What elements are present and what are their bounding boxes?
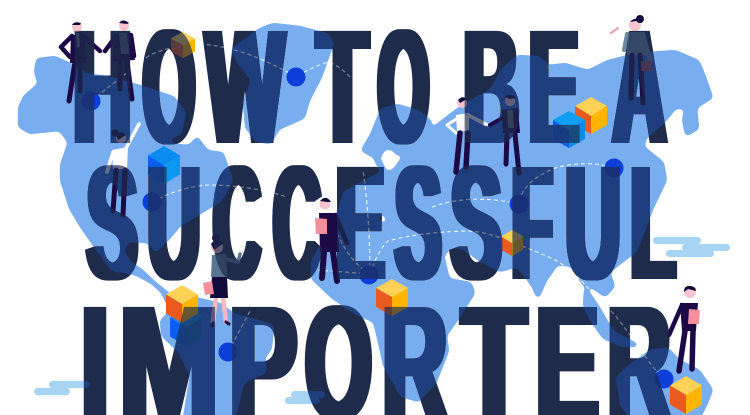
title: how to be a successful importer: H bbox=[73, 0, 132, 178]
title: how to be a successful importer: O bbox=[143, 0, 195, 178]
title: how to be a successful importer: S bbox=[395, 131, 441, 314]
title: how to be a successful importer: F bbox=[512, 131, 552, 314]
title: how to be a successful importer: U bbox=[148, 131, 200, 314]
icon: yellow cube upper right bbox=[575, 97, 607, 134]
person: businessman shaking hands left bbox=[61, 22, 100, 101]
icon: cube australia bbox=[670, 376, 702, 414]
title: how to be a successful importer: S bbox=[87, 131, 138, 314]
title: how to be a successful importer: B bbox=[464, 0, 519, 178]
dashed trade routes bbox=[91, 44, 664, 378]
title: how to be a successful importer: E bbox=[336, 131, 384, 314]
title: how to be a successful importer: C bbox=[274, 131, 320, 314]
person: businessman shaking hands right bbox=[105, 20, 135, 99]
icon: blue cube left bbox=[148, 146, 180, 184]
title: how to be a successful importer: C bbox=[214, 131, 260, 314]
title: how to be a successful importer: W bbox=[206, 0, 284, 178]
person: woman at top right bbox=[611, 15, 652, 103]
person: man in dark suit bbox=[490, 95, 520, 173]
icon: cube on the O bbox=[171, 32, 195, 58]
clouds bbox=[34, 237, 730, 404]
icon: yellow cube africa bbox=[376, 279, 408, 316]
icon: blue cube lower left bbox=[170, 308, 202, 346]
person: man with folder centre bbox=[315, 198, 347, 281]
person: woman with folder bbox=[203, 234, 240, 326]
title dimming where it passes over the art bbox=[74, 30, 670, 388]
title: how to be a successful importer: S bbox=[451, 131, 502, 314]
person: man at lower right bbox=[669, 286, 700, 371]
icon: yellow cube lower left bbox=[166, 285, 198, 323]
title: how to be a successful importer: E bbox=[529, 0, 578, 178]
title: how to be a successful importer: U bbox=[566, 131, 620, 314]
text: L bbox=[631, 131, 675, 314]
hub dots bbox=[82, 68, 674, 388]
icon: blue cube upper right bbox=[553, 111, 585, 148]
title: how to be a successful importer: O bbox=[378, 0, 429, 178]
icon: small cube asia bbox=[501, 230, 523, 256]
title: how to be a successful importer: T bbox=[317, 0, 368, 178]
person: woman with white shirt bbox=[107, 124, 139, 215]
person: man in white shirt bbox=[447, 97, 487, 172]
title: how to be a successful importer: A bbox=[613, 0, 666, 178]
